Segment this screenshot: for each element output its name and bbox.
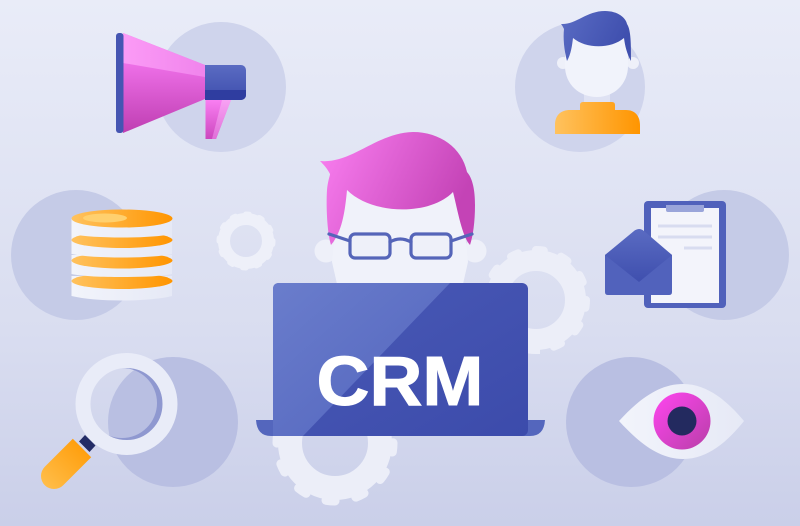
icon: magnifier xyxy=(41,360,170,489)
icon: eye xyxy=(619,384,744,459)
circle: magnifier backdrop xyxy=(108,357,238,487)
icon: small gear xyxy=(219,214,273,268)
icon: right gear xyxy=(486,250,586,350)
circle: clipboard backdrop xyxy=(659,190,789,320)
ear: left xyxy=(314,240,338,262)
icon: database xyxy=(72,210,172,300)
laptop base xyxy=(256,420,545,436)
circle: person backdrop xyxy=(515,22,645,152)
character: head with hair and glasses xyxy=(314,132,486,284)
face xyxy=(332,185,468,284)
ear: right xyxy=(464,240,486,262)
icon: person xyxy=(555,11,640,134)
laptop xyxy=(256,283,545,436)
icon: bottom gear xyxy=(277,385,393,501)
icon: clipboard with envelope xyxy=(605,201,726,308)
circle: database backdrop xyxy=(11,190,141,320)
glasses xyxy=(329,234,472,258)
laptop screen xyxy=(273,283,528,436)
circle: eye backdrop xyxy=(566,357,696,487)
circle: megaphone backdrop xyxy=(156,22,286,152)
CRM label: CRM xyxy=(316,342,484,420)
hair xyxy=(320,132,475,245)
icon: megaphone xyxy=(116,33,246,139)
